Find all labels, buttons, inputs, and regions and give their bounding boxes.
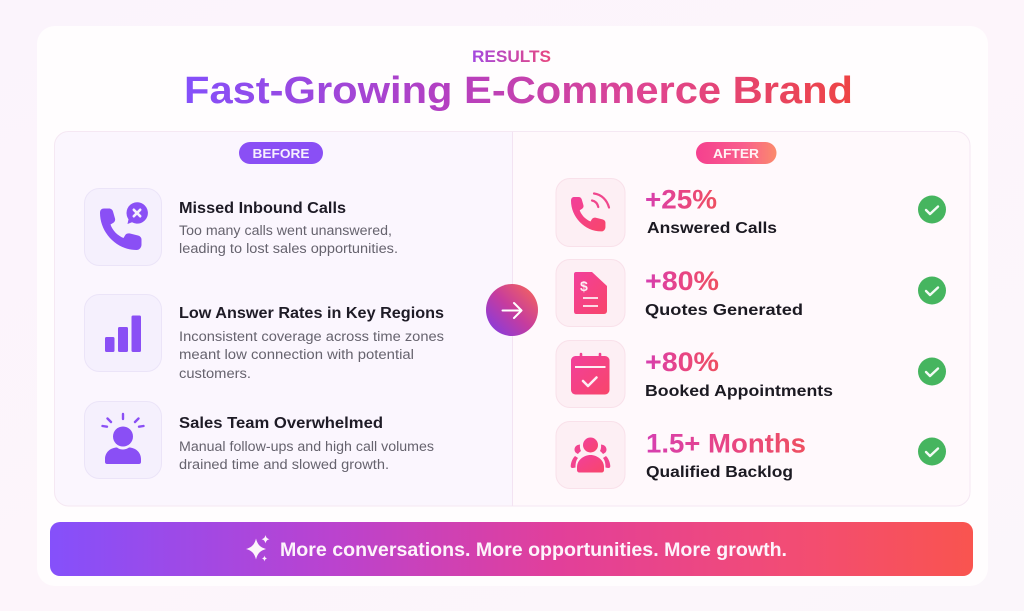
stat: 1.5+ months qualified backlog: Qualified Backlog xyxy=(646,464,793,481)
text: low answer rates: Low Answer Rates in Key Regions xyxy=(179,305,444,322)
text: missed inbound calls xyxy=(179,200,398,256)
text: missed inbound calls: Too many calls went unanswered, xyxy=(179,223,392,238)
panel: after xyxy=(556,142,946,488)
badge: before: BEFORE xyxy=(252,146,310,161)
heading: results eyebrow: RESULTS xyxy=(472,47,551,66)
item: low answer rates xyxy=(84,294,444,381)
stat: +25% answered calls xyxy=(645,184,777,237)
stat: +25% answered calls: +25% xyxy=(645,184,717,214)
text: low answer rates: customers. xyxy=(179,366,251,381)
stat: 1.5+ months qualified backlog: 1.5+ Months xyxy=(646,428,806,458)
icon: check xyxy=(918,276,946,304)
text: low answer rates: Inconsistent coverage across time zones xyxy=(179,329,444,344)
stat: 1.5+ months qualified backlog xyxy=(646,428,806,481)
stat: +80% booked appointments: Booked Appointments xyxy=(645,383,833,400)
icon: signal bars xyxy=(84,294,162,372)
stat: +80% quotes generated xyxy=(645,266,803,319)
icon: overwhelmed person xyxy=(84,402,162,478)
icon: check xyxy=(918,438,946,466)
item: quotes generated xyxy=(556,260,946,326)
icon: dollar document xyxy=(556,260,625,326)
panel: comparison container xyxy=(54,132,970,506)
panel: before xyxy=(84,142,444,478)
icon: check xyxy=(918,196,946,224)
badge: after: AFTER xyxy=(713,146,760,161)
banner: closing message xyxy=(50,522,973,576)
icon: group of people xyxy=(556,422,625,488)
icon: dollar document: $ xyxy=(580,278,588,294)
item: sales team overwhelmed xyxy=(84,402,434,478)
text: missed inbound calls: Missed Inbound Calls xyxy=(179,200,346,217)
stat: +80% booked appointments: +80% xyxy=(645,347,719,377)
item: booked appointments xyxy=(556,340,946,408)
stat: +80% booked appointments xyxy=(645,347,833,400)
item: answered calls xyxy=(556,178,946,246)
arrow: before to after xyxy=(486,284,538,336)
text: sales team overwhelmed: Manual follow-ups and high call volumes xyxy=(179,439,434,454)
stat: +25% answered calls: Answered Calls xyxy=(647,220,777,237)
text: sales team overwhelmed: drained time and slowed growth. xyxy=(179,457,389,472)
icon: calendar xyxy=(556,340,625,408)
icon: phone with x xyxy=(84,188,162,266)
icon: check xyxy=(918,358,946,386)
item: missed inbound calls xyxy=(84,188,398,266)
badge: after xyxy=(696,142,776,164)
text: closing message: More conversations. More opportunities. More growth. xyxy=(280,540,787,561)
text: sales team overwhelmed: Sales Team Overwhelmed xyxy=(179,415,383,432)
badge: before xyxy=(239,142,323,164)
text: low answer rates xyxy=(179,305,444,381)
text: low answer rates: meant low connection with potential xyxy=(179,347,414,362)
stat: +80% quotes generated: Quotes Generated xyxy=(645,302,803,319)
title: Fast-Growing E-Commerce Brand xyxy=(184,70,853,112)
item: qualified backlog xyxy=(556,422,946,488)
stat: +80% quotes generated: +80% xyxy=(645,266,719,296)
text: missed inbound calls: leading to lost sales opportunities. xyxy=(179,241,398,256)
text: sales team overwhelmed xyxy=(179,415,434,472)
icon: phone ringing xyxy=(556,178,625,246)
icon: sparkles xyxy=(246,535,270,562)
